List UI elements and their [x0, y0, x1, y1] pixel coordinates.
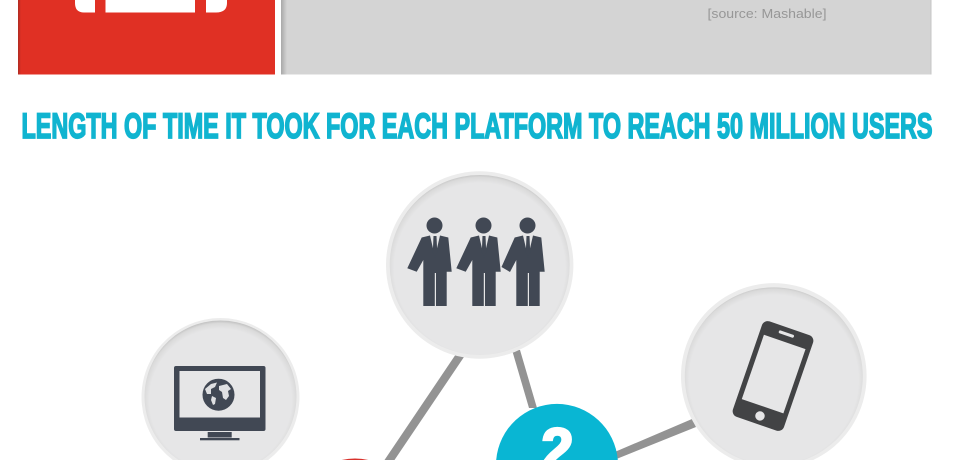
- figure three: [502, 218, 545, 306]
- icon: cropped white device: [75, 0, 227, 12]
- figure one: [407, 218, 452, 306]
- icon: smartphone: [731, 319, 815, 433]
- node: red badge: [342, 459, 368, 460]
- connector lines: [384, 350, 696, 460]
- source note: [source: Mashable]: [708, 6, 826, 21]
- panel: red icon card: [18, 0, 275, 74]
- node: people: [386, 171, 573, 359]
- node: smartphone: [681, 283, 867, 460]
- globe: [202, 379, 234, 411]
- panel: grey source card: [281, 0, 932, 74]
- icon: three businessmen: [407, 218, 545, 306]
- figure two: [456, 218, 501, 306]
- node: cyan number badge: [496, 404, 618, 460]
- node: monitor: [142, 318, 300, 460]
- icon: desktop monitor with globe: [174, 366, 266, 440]
